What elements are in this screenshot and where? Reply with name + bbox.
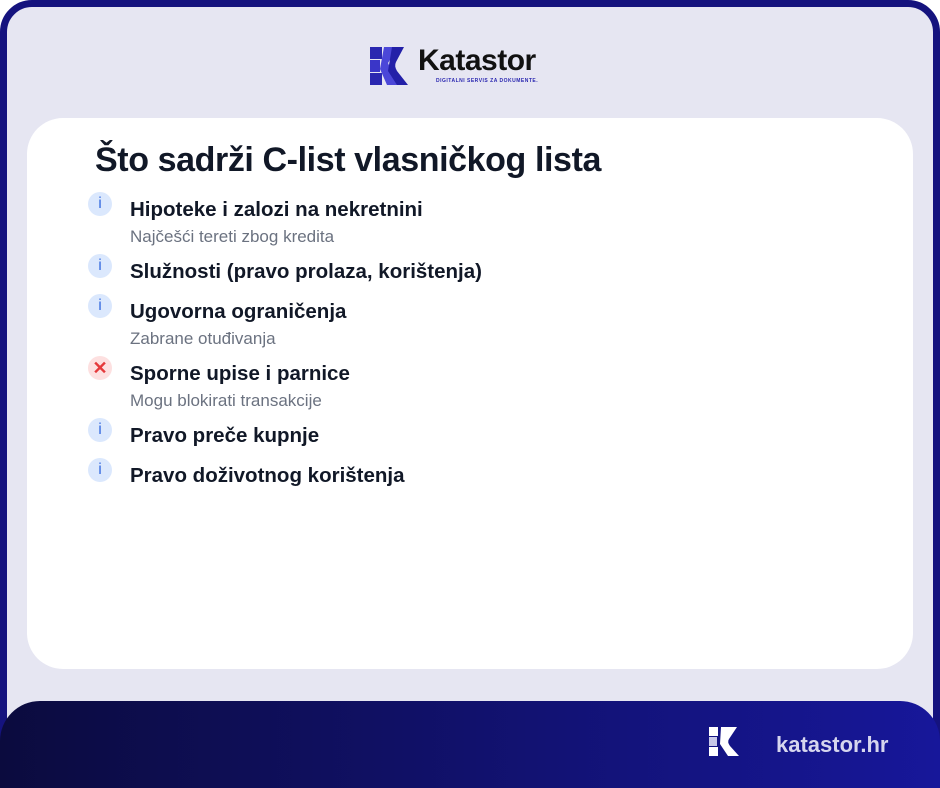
item 3: Ugovorna ograničenja <box>130 300 346 323</box>
card <box>27 118 913 669</box>
item 3: Zabrane otuđivanja <box>130 329 276 348</box>
item 3: i <box>98 297 102 314</box>
icon: footer K <box>709 727 739 756</box>
item 2: Služnosti (pravo prolaza, korištenja) <box>130 260 482 283</box>
logo <box>370 44 538 85</box>
logo text: Katastor <box>418 44 536 77</box>
title: Što sadrži C-list vlasničkog lista <box>95 141 601 179</box>
item 3 <box>88 294 347 348</box>
item 5: i <box>98 421 102 438</box>
icon: logo K <box>370 47 408 85</box>
item 2: i <box>98 257 102 274</box>
item 4: Sporne upise i parnice <box>130 362 350 385</box>
item 6: Pravo doživotnog korištenja <box>130 464 405 487</box>
footer <box>0 701 940 788</box>
item 4 <box>88 356 350 410</box>
item 6 <box>88 458 405 487</box>
item 1 <box>88 192 423 246</box>
logo: DIGITALNI SERVIS ZA DOKUMENTE. <box>436 78 538 84</box>
footer url: katastor.hr <box>776 732 888 757</box>
item 5: Pravo preče kupnje <box>130 424 319 447</box>
item 4: Mogu blokirati transakcije <box>130 391 322 410</box>
item 4: ✕ <box>92 358 108 378</box>
item 1: i <box>98 195 102 212</box>
item 1: Hipoteke i zalozi na nekretnini <box>130 198 423 221</box>
item 1: Najčešći tereti zbog kredita <box>130 227 334 246</box>
item 6: i <box>98 461 102 478</box>
item 5 <box>88 418 319 447</box>
